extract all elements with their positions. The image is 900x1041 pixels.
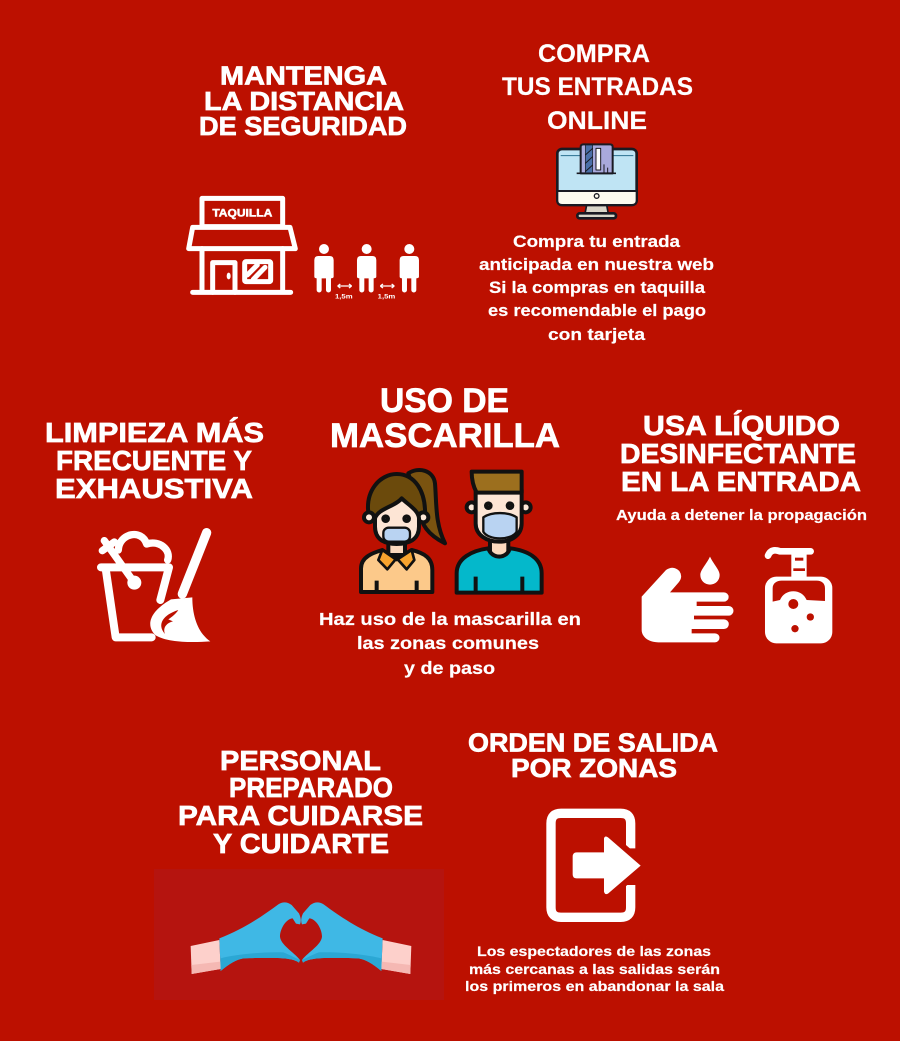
text: haz uso de la mascarilla	[319, 609, 581, 678]
icon: exit door with arrow	[551, 813, 641, 917]
text: compra tu entrada: con tarjeta	[548, 326, 646, 344]
heading: mantenga la distancia de seguridad	[199, 60, 407, 141]
icon: people at safe distance: 1,5m	[378, 293, 396, 300]
heading: limpieza mas frecuente y exhaustiva: EXHAUSTIVA	[55, 473, 253, 504]
panel: orden de salida	[465, 728, 724, 994]
text: ayuda a detener la propagacion: Ayuda a detener la propagación	[616, 508, 867, 524]
text: compra tu entrada: es recomendable el pago	[488, 302, 706, 320]
heading: orden de salida por zonas: ORDEN DE SALIDA	[468, 728, 718, 758]
panel: mantenga la distancia	[189, 60, 419, 300]
icon: soap dispenser	[765, 550, 832, 643]
heading: personal preparado	[178, 745, 423, 859]
heading: mantenga la distancia de seguridad: LA DISTANCIA	[204, 86, 404, 116]
heading: orden de salida por zonas: POR ZONAS	[511, 753, 677, 783]
text: compra tu entrada: anticipada en nuestra web	[479, 256, 714, 274]
image: gloved hands forming a heart	[154, 869, 444, 1000]
icon: taquilla booth	[189, 198, 295, 292]
heading: compra tus entradas online: ONLINE	[547, 107, 647, 135]
heading: personal preparado: PREPARADO	[229, 772, 393, 803]
icon: woman with mask	[361, 470, 445, 592]
heading: personal preparado: PARA CUIDARSE	[178, 800, 423, 831]
icon: people at safe distance: 1,5m	[335, 293, 353, 300]
panel: compra online	[479, 40, 714, 344]
heading: usa liquido desinfectante: DESINFECTANTE	[620, 438, 856, 469]
text: haz uso de la mascarilla: las zonas comunes	[357, 633, 539, 653]
heading: uso de mascarilla: MASCARILLA	[330, 417, 560, 455]
text: compra tu entrada: Si la compras en taquilla	[489, 279, 706, 297]
heading: personal preparado: PERSONAL	[220, 745, 381, 776]
text: compra tu entrada	[479, 233, 714, 344]
heading: orden de salida por zonas	[468, 728, 718, 783]
panel: personal preparado	[154, 745, 444, 1000]
text: haz uso de la mascarilla: Haz uso de la mascarilla en	[319, 609, 581, 629]
heading: usa liquido desinfectante: USA LÍQUIDO	[643, 410, 840, 441]
icon: taquilla booth: TAQUILLA	[212, 208, 272, 220]
icon: people at safe distance	[314, 244, 419, 300]
heading: mantenga la distancia de seguridad: MANTENGA	[220, 60, 387, 90]
text: los espectadores: los primeros en abandonar la sala	[465, 978, 724, 994]
panel: liquido desinfectante	[616, 410, 867, 643]
icon: man with mask	[457, 472, 542, 593]
heading: limpieza mas frecuente y exhaustiva: LIMPIEZA MÁS	[45, 417, 264, 448]
heading: mantenga la distancia de seguridad: DE SEGURIDAD	[199, 111, 407, 141]
heading: usa liquido desinfectante	[620, 410, 861, 497]
text: los espectadores: más cercanas a las salidas serán	[469, 961, 720, 977]
text: los espectadores	[465, 943, 724, 994]
icon: bucket and broom	[101, 533, 210, 642]
panel: uso de mascarilla	[319, 382, 581, 678]
icon: hand with drop	[642, 557, 733, 642]
text: compra tu entrada: Compra tu entrada	[513, 233, 681, 251]
heading: personal preparado: Y CUIDARTE	[213, 828, 389, 859]
heading: limpieza mas frecuente y exhaustiva	[45, 417, 264, 504]
heading: uso de mascarilla	[330, 382, 560, 455]
panel: limpieza	[45, 417, 264, 642]
heading: limpieza mas frecuente y exhaustiva: FRECUENTE Y	[56, 445, 252, 476]
heading: usa liquido desinfectante: EN LA ENTRADA	[621, 466, 861, 497]
heading: compra tus entradas online	[502, 40, 693, 135]
heading: compra tus entradas online: COMPRA	[538, 40, 650, 68]
icon: computer with card	[557, 144, 637, 218]
heading: uso de mascarilla: USO DE	[380, 382, 509, 420]
heading: compra tus entradas online: TUS ENTRADAS	[502, 73, 693, 101]
text: haz uso de la mascarilla: y de paso	[404, 658, 495, 678]
text: los espectadores: Los espectadores de las zonas	[477, 943, 711, 959]
